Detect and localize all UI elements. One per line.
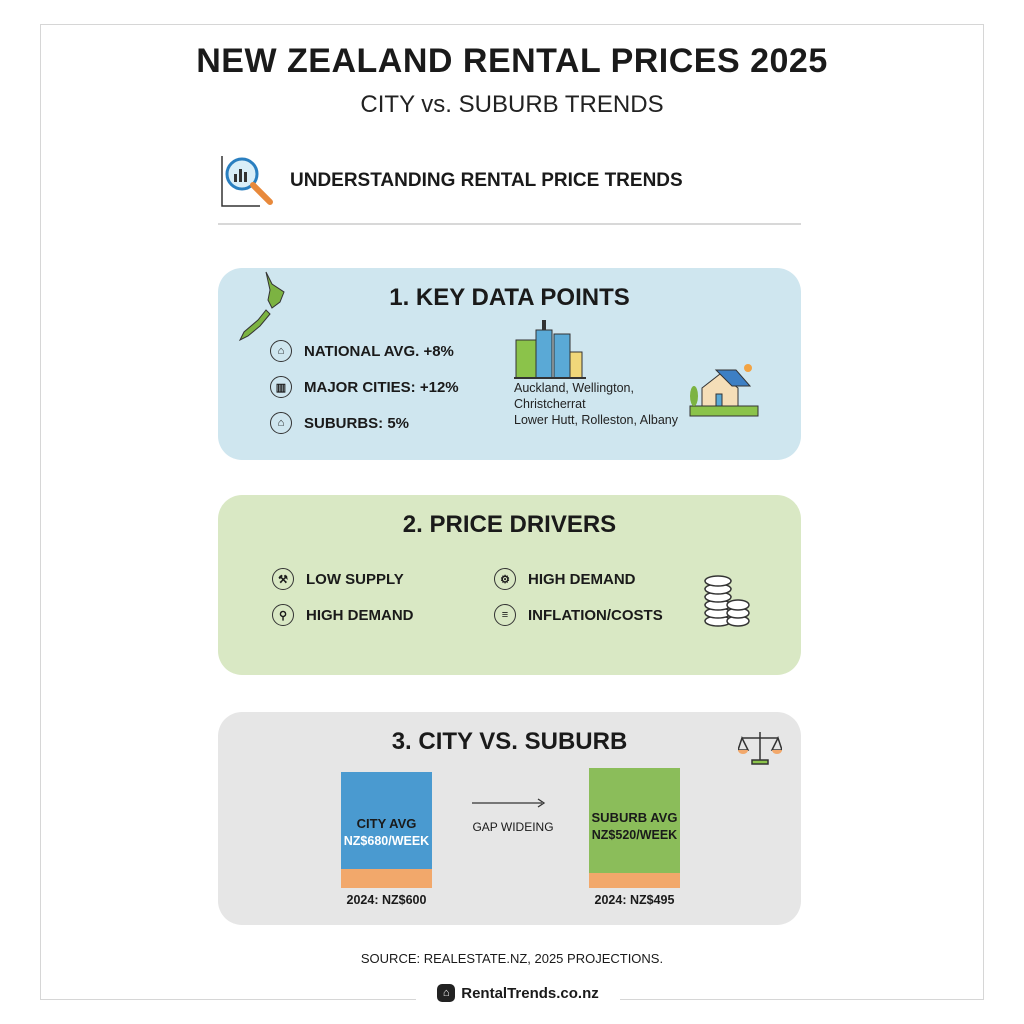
- city list text: [514, 381, 678, 427]
- arrow: gap widening: [472, 798, 554, 834]
- item list: NATIONAL AVG. +8%: [304, 342, 454, 360]
- bar: city: NZ$680/WEEK: [344, 834, 429, 848]
- panel title: 1. KEY DATA POINTS: [389, 284, 630, 311]
- icon: scales: [738, 732, 782, 765]
- drivers list: HIGH DEMAND: [306, 606, 414, 624]
- source note: SOURCE: REALESTATE.NZ, 2025 PROJECTIONS.: [361, 951, 663, 966]
- drivers list: INFLATION/COSTS: [528, 606, 663, 624]
- icon: NZ map: [239, 272, 285, 341]
- panel title: 2. PRICE DRIVERS: [403, 511, 616, 538]
- drivers list: [272, 568, 663, 626]
- icon: magnifier chart: [221, 156, 273, 207]
- footer logo: RentalTrends.co.nz: [461, 984, 599, 1002]
- panel title: 3. CITY VS. SUBURB: [392, 728, 627, 755]
- icon: city skyline: [514, 320, 586, 379]
- item list: ▥: [276, 382, 286, 394]
- bar: city: [341, 772, 432, 888]
- city list text: Auckland, Wellington,: [514, 381, 634, 395]
- footer logo: ⌂: [443, 987, 450, 999]
- drivers list: ≡: [502, 609, 508, 621]
- icon: coin stacks: [704, 575, 750, 627]
- item list: ⌂: [278, 417, 284, 429]
- city 2024 label: 2024: NZ$600: [347, 893, 426, 907]
- drivers list: ⚒: [278, 574, 288, 586]
- subtitle: CITY vs. SUBURB TRENDS: [360, 91, 664, 118]
- item list: SUBURBS: 5%: [304, 414, 409, 432]
- bar: suburb: NZ$520/WEEK: [592, 828, 677, 842]
- icon: house: [690, 364, 758, 416]
- city list text: Lower Hutt, Rolleston, Albany: [514, 413, 678, 427]
- city list text: Christcherrat: [514, 397, 586, 411]
- drivers list: ⚙: [500, 574, 510, 586]
- footer logo: [416, 982, 620, 1004]
- drivers list: ⚲: [279, 610, 287, 622]
- panel: city vs suburb: [218, 712, 801, 925]
- arrow: gap widening: GAP WIDEING: [472, 820, 554, 834]
- item list: MAJOR CITIES: +12%: [304, 378, 459, 396]
- bar: suburb: SUBURB AVG: [592, 810, 677, 825]
- item list: ⌂: [278, 345, 284, 357]
- panel: price drivers: [218, 495, 801, 675]
- title: NEW ZEALAND RENTAL PRICES 2025: [196, 42, 828, 80]
- drivers list: LOW SUPPLY: [306, 570, 404, 588]
- suburb 2024 label: 2024: NZ$495: [595, 893, 674, 907]
- panel: key data points: [218, 268, 801, 460]
- drivers list: HIGH DEMAND: [528, 570, 636, 588]
- bar: suburb: [589, 768, 680, 888]
- section heading: UNDERSTANDING RENTAL PRICE TRENDS: [290, 170, 683, 191]
- item list: [270, 340, 459, 434]
- bar: city: CITY AVG: [357, 816, 416, 831]
